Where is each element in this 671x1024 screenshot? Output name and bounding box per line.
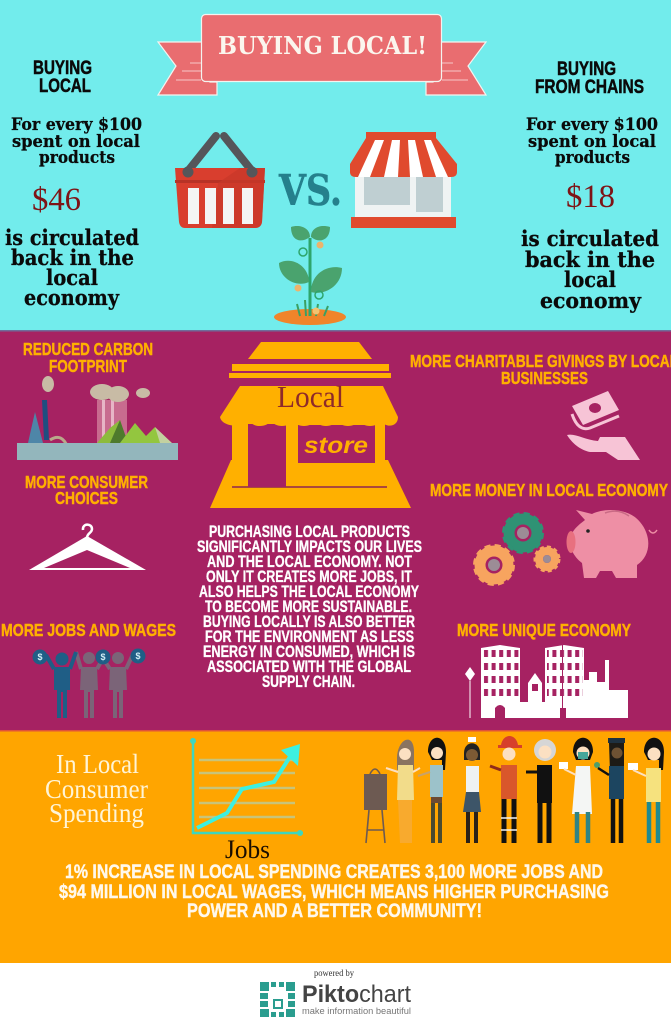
text block: job statistics: POWER AND A BETTER COMMUNITY! <box>187 900 482 922</box>
figure: easel <box>364 769 387 843</box>
figure: doctor <box>559 738 593 843</box>
icon: piggy bank <box>566 510 657 578</box>
figure: pilot <box>594 738 625 843</box>
text block: description: AND THE LOCAL ECONOMY. NOT <box>207 553 412 571</box>
text block: description: FOR THE ENVIRONMENT AS LESS <box>205 628 414 646</box>
text: Local: Local <box>277 379 344 414</box>
text block: description: SIGNIFICANTLY IMPACTS OUR LIVES <box>197 538 422 556</box>
text block: left intro <box>11 115 142 168</box>
heading: buying local: LOCAL <box>39 75 91 97</box>
text block: left intro: products <box>39 148 115 168</box>
text block: description: ALSO HELPS THE LOCAL ECONOMY <box>199 583 419 601</box>
text block: description: ENERGY IN CONSUMED, WHICH IS <box>203 643 415 661</box>
number: $18: $18 <box>566 179 615 215</box>
text: Jobs: Jobs <box>225 835 270 864</box>
text block: left outcome: back in the <box>11 245 134 270</box>
icon: gears <box>475 514 559 584</box>
text block: left outcome: economy <box>24 285 120 310</box>
text block: in local consumer spending <box>45 749 148 828</box>
text block: description: ASSOCIATED WITH THE GLOBAL <box>207 658 411 676</box>
number: $46: $46 <box>32 182 81 218</box>
line chart: rising arrow <box>190 738 303 836</box>
text block: right intro: spent on local <box>528 132 657 152</box>
heading: more jobs and wages: MORE JOBS AND WAGES <box>1 620 176 640</box>
heading: reduced carbon footprint <box>23 339 153 376</box>
heading: more charitable givings: BUSINESSES <box>501 368 588 388</box>
heading: more consumer choices <box>25 472 148 508</box>
text block: left outcome: is circulated <box>5 225 139 250</box>
text block: right outcome <box>521 226 659 313</box>
figure: worker 3 <box>463 737 481 843</box>
title banner: BUYING LOCAL! <box>218 31 427 60</box>
text block: in local consumer spending: Consumer <box>45 774 148 804</box>
icon: city skyline <box>465 645 628 718</box>
text block: in local consumer spending: In Local <box>56 749 139 779</box>
icon: hand receiving cash <box>567 391 640 460</box>
heading: reduced carbon footprint: FOOTPRINT <box>49 356 127 376</box>
text: powered by: powered by <box>314 968 354 978</box>
icon: people with money bags: $ <box>100 652 106 662</box>
text block: left intro: spent on local <box>12 132 141 152</box>
figure: scientist <box>526 739 556 843</box>
text: VS.: VS. <box>278 166 342 215</box>
icon: people with money bags: $ <box>135 651 141 661</box>
figure: worker 2 <box>418 738 446 843</box>
text block: job statistics <box>59 861 609 922</box>
heading: more consumer choices: CHOICES <box>55 488 118 508</box>
heading: more consumer choices: MORE CONSUMER <box>25 472 148 492</box>
text block: in local consumer spending: Spending <box>49 798 144 828</box>
text block: right outcome: local <box>564 267 616 292</box>
footer: Piktochart credit <box>0 963 671 1024</box>
panel: benefits <box>0 330 671 731</box>
icon: shopping basket <box>175 136 265 228</box>
text: store: store <box>304 432 368 458</box>
heading: buying local: BUYING <box>33 57 92 79</box>
illustration: local store <box>210 342 411 508</box>
icon: money plant <box>274 226 346 325</box>
heading: more charitable givings <box>410 351 671 388</box>
panel: buying local versus chains <box>0 0 671 330</box>
text block: description: BUYING LOCALLY IS ALSO BETTER <box>203 613 415 631</box>
heading: buying local <box>33 57 92 97</box>
text block: description <box>197 523 422 691</box>
text block: left outcome: local <box>46 265 98 290</box>
icon: hanger <box>29 525 146 570</box>
illustration: workers <box>364 736 664 843</box>
text block: right outcome: economy <box>540 288 642 313</box>
text block: right outcome: is circulated <box>521 226 659 251</box>
text block: left outcome <box>5 225 139 310</box>
icon: storefront <box>350 132 457 228</box>
text: tagline: make information beautiful <box>302 1006 411 1016</box>
figure: firefighter <box>490 736 522 843</box>
text block: left intro: For every $100 <box>11 115 142 135</box>
title banner <box>158 14 486 95</box>
text block: right intro: products <box>555 148 630 168</box>
heading: buying from chains <box>535 58 644 98</box>
heading: buying from chains: FROM CHAINS <box>535 76 644 98</box>
figure: artist <box>386 740 420 843</box>
heading: reduced carbon footprint: REDUCED CARBON <box>23 339 153 359</box>
icon: people with money bags <box>32 648 146 718</box>
logo mark <box>260 982 295 1017</box>
text block: right intro <box>526 115 658 168</box>
text block: description: TO BECOME MORE SUSTAINABLE. <box>205 598 412 616</box>
text block: description: PURCHASING LOCAL PRODUCTS <box>209 523 410 541</box>
heading: buying from chains: BUYING <box>557 58 616 80</box>
panel: consumer spending and jobs <box>0 730 671 963</box>
figure: woman with tablet <box>628 738 664 843</box>
text block: description: SUPPLY CHAIN. <box>262 673 355 691</box>
text block: right outcome: back in the <box>525 247 655 272</box>
text: Piktochart: Piktochart <box>302 981 411 1008</box>
icon: factory and mountains <box>17 376 178 460</box>
icon: people with money bags: $ <box>37 652 43 662</box>
text block: description: ONLY IT CREATES MORE JOBS, IT <box>206 568 412 586</box>
text block: right intro: For every $100 <box>526 115 658 135</box>
